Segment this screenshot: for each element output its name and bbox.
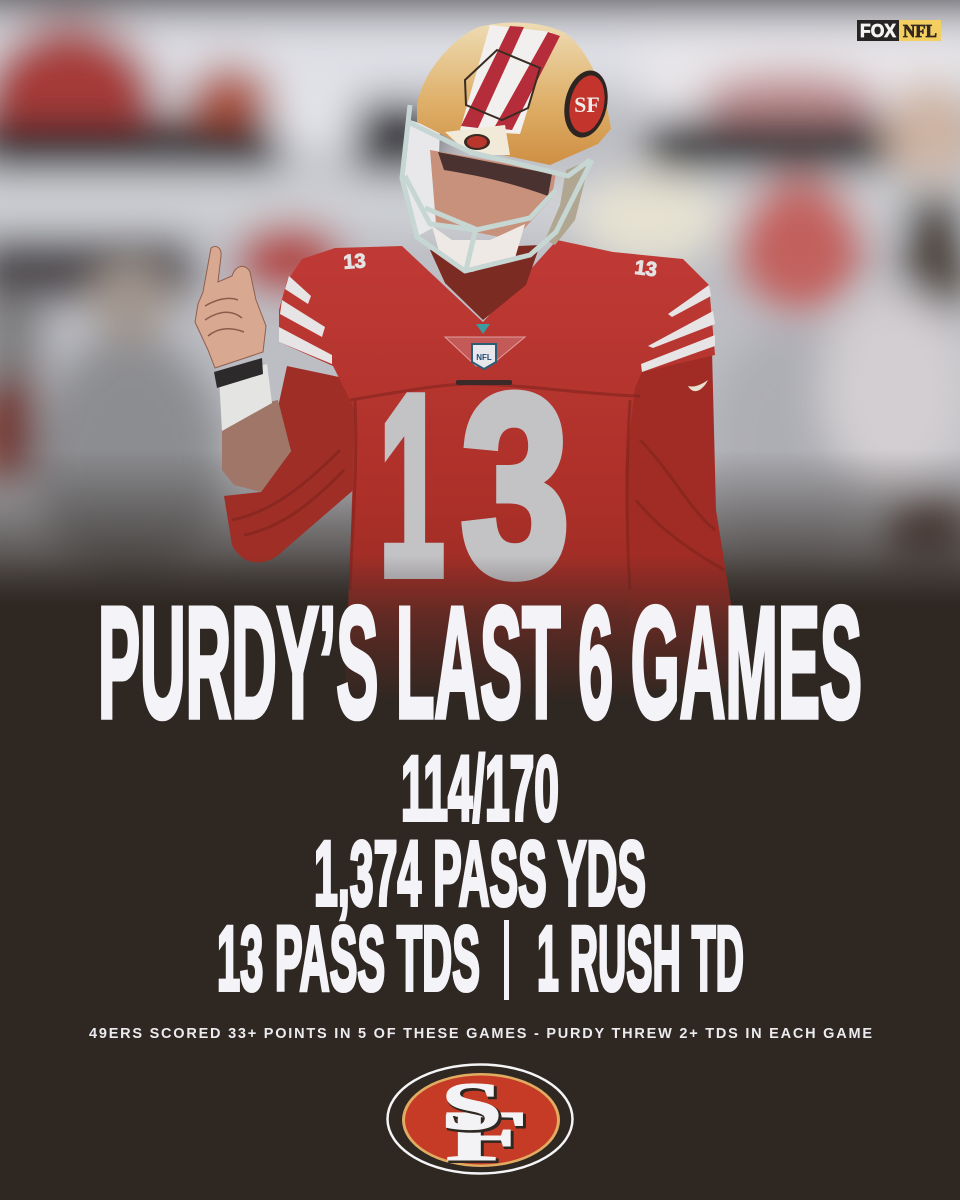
text: 114/170	[401, 738, 559, 840]
helmet right hardware	[545, 160, 590, 245]
F letter: F	[445, 1096, 529, 1176]
helmet SF logo: SF	[574, 92, 600, 117]
hand with pointing finger	[195, 246, 266, 368]
sleeve stripes left	[279, 276, 332, 364]
49ers logo	[388, 1064, 572, 1178]
face	[430, 150, 556, 240]
NFL chest emblem: NFL	[476, 353, 492, 362]
helmet center stripe	[460, 25, 552, 134]
NFL chest emblem	[445, 337, 525, 385]
wristband	[214, 358, 263, 388]
S letter shadow: S	[443, 1070, 504, 1146]
player: Brock Purdy	[195, 23, 740, 700]
facemask	[402, 105, 592, 271]
caption: 49ERS SCORED 33+ POINTS IN 5 OF THESE GAMES - PURDY THREW 2+ TDS IN EACH GAME	[89, 1026, 872, 1042]
S letter: S	[441, 1068, 502, 1144]
neck collar	[430, 245, 540, 320]
F letter shadow: F	[447, 1098, 531, 1178]
left sleeve	[224, 366, 365, 562]
helmet	[402, 23, 614, 272]
FOX NFL logo: FOX	[860, 21, 896, 41]
shoulder numbers: 13	[633, 257, 658, 281]
wrist wrap	[219, 364, 272, 431]
FOX NFL logo	[857, 20, 941, 41]
helmet SF logo	[558, 66, 614, 142]
finger knuckle lines	[205, 298, 244, 336]
nose bumper logo	[445, 125, 510, 155]
torso jersey	[279, 240, 715, 700]
collar teal notch	[476, 324, 490, 334]
helmet shell	[417, 23, 611, 165]
right sleeve	[615, 350, 740, 690]
jersey number 13: 3	[461, 342, 570, 629]
FOX NFL logo: NFL	[903, 21, 937, 41]
jersey shading folds	[232, 384, 724, 590]
shoulder numbers	[343, 250, 658, 281]
helmet red stripes	[461, 26, 560, 130]
stat: touchdowns: 13 PASS TDS	[217, 908, 480, 1010]
helmet crest hexagon	[465, 50, 540, 120]
jersey number 13: 1	[379, 343, 445, 629]
jersey number 13	[379, 342, 570, 629]
forearm	[222, 400, 291, 492]
sleeve stripes right	[641, 285, 715, 372]
inner padding	[404, 120, 440, 236]
shoulder numbers: 13	[343, 250, 366, 274]
Nike swoosh	[688, 380, 708, 391]
chin guard	[432, 224, 525, 272]
eye shade	[438, 152, 552, 196]
lower fade over player	[0, 555, 960, 705]
